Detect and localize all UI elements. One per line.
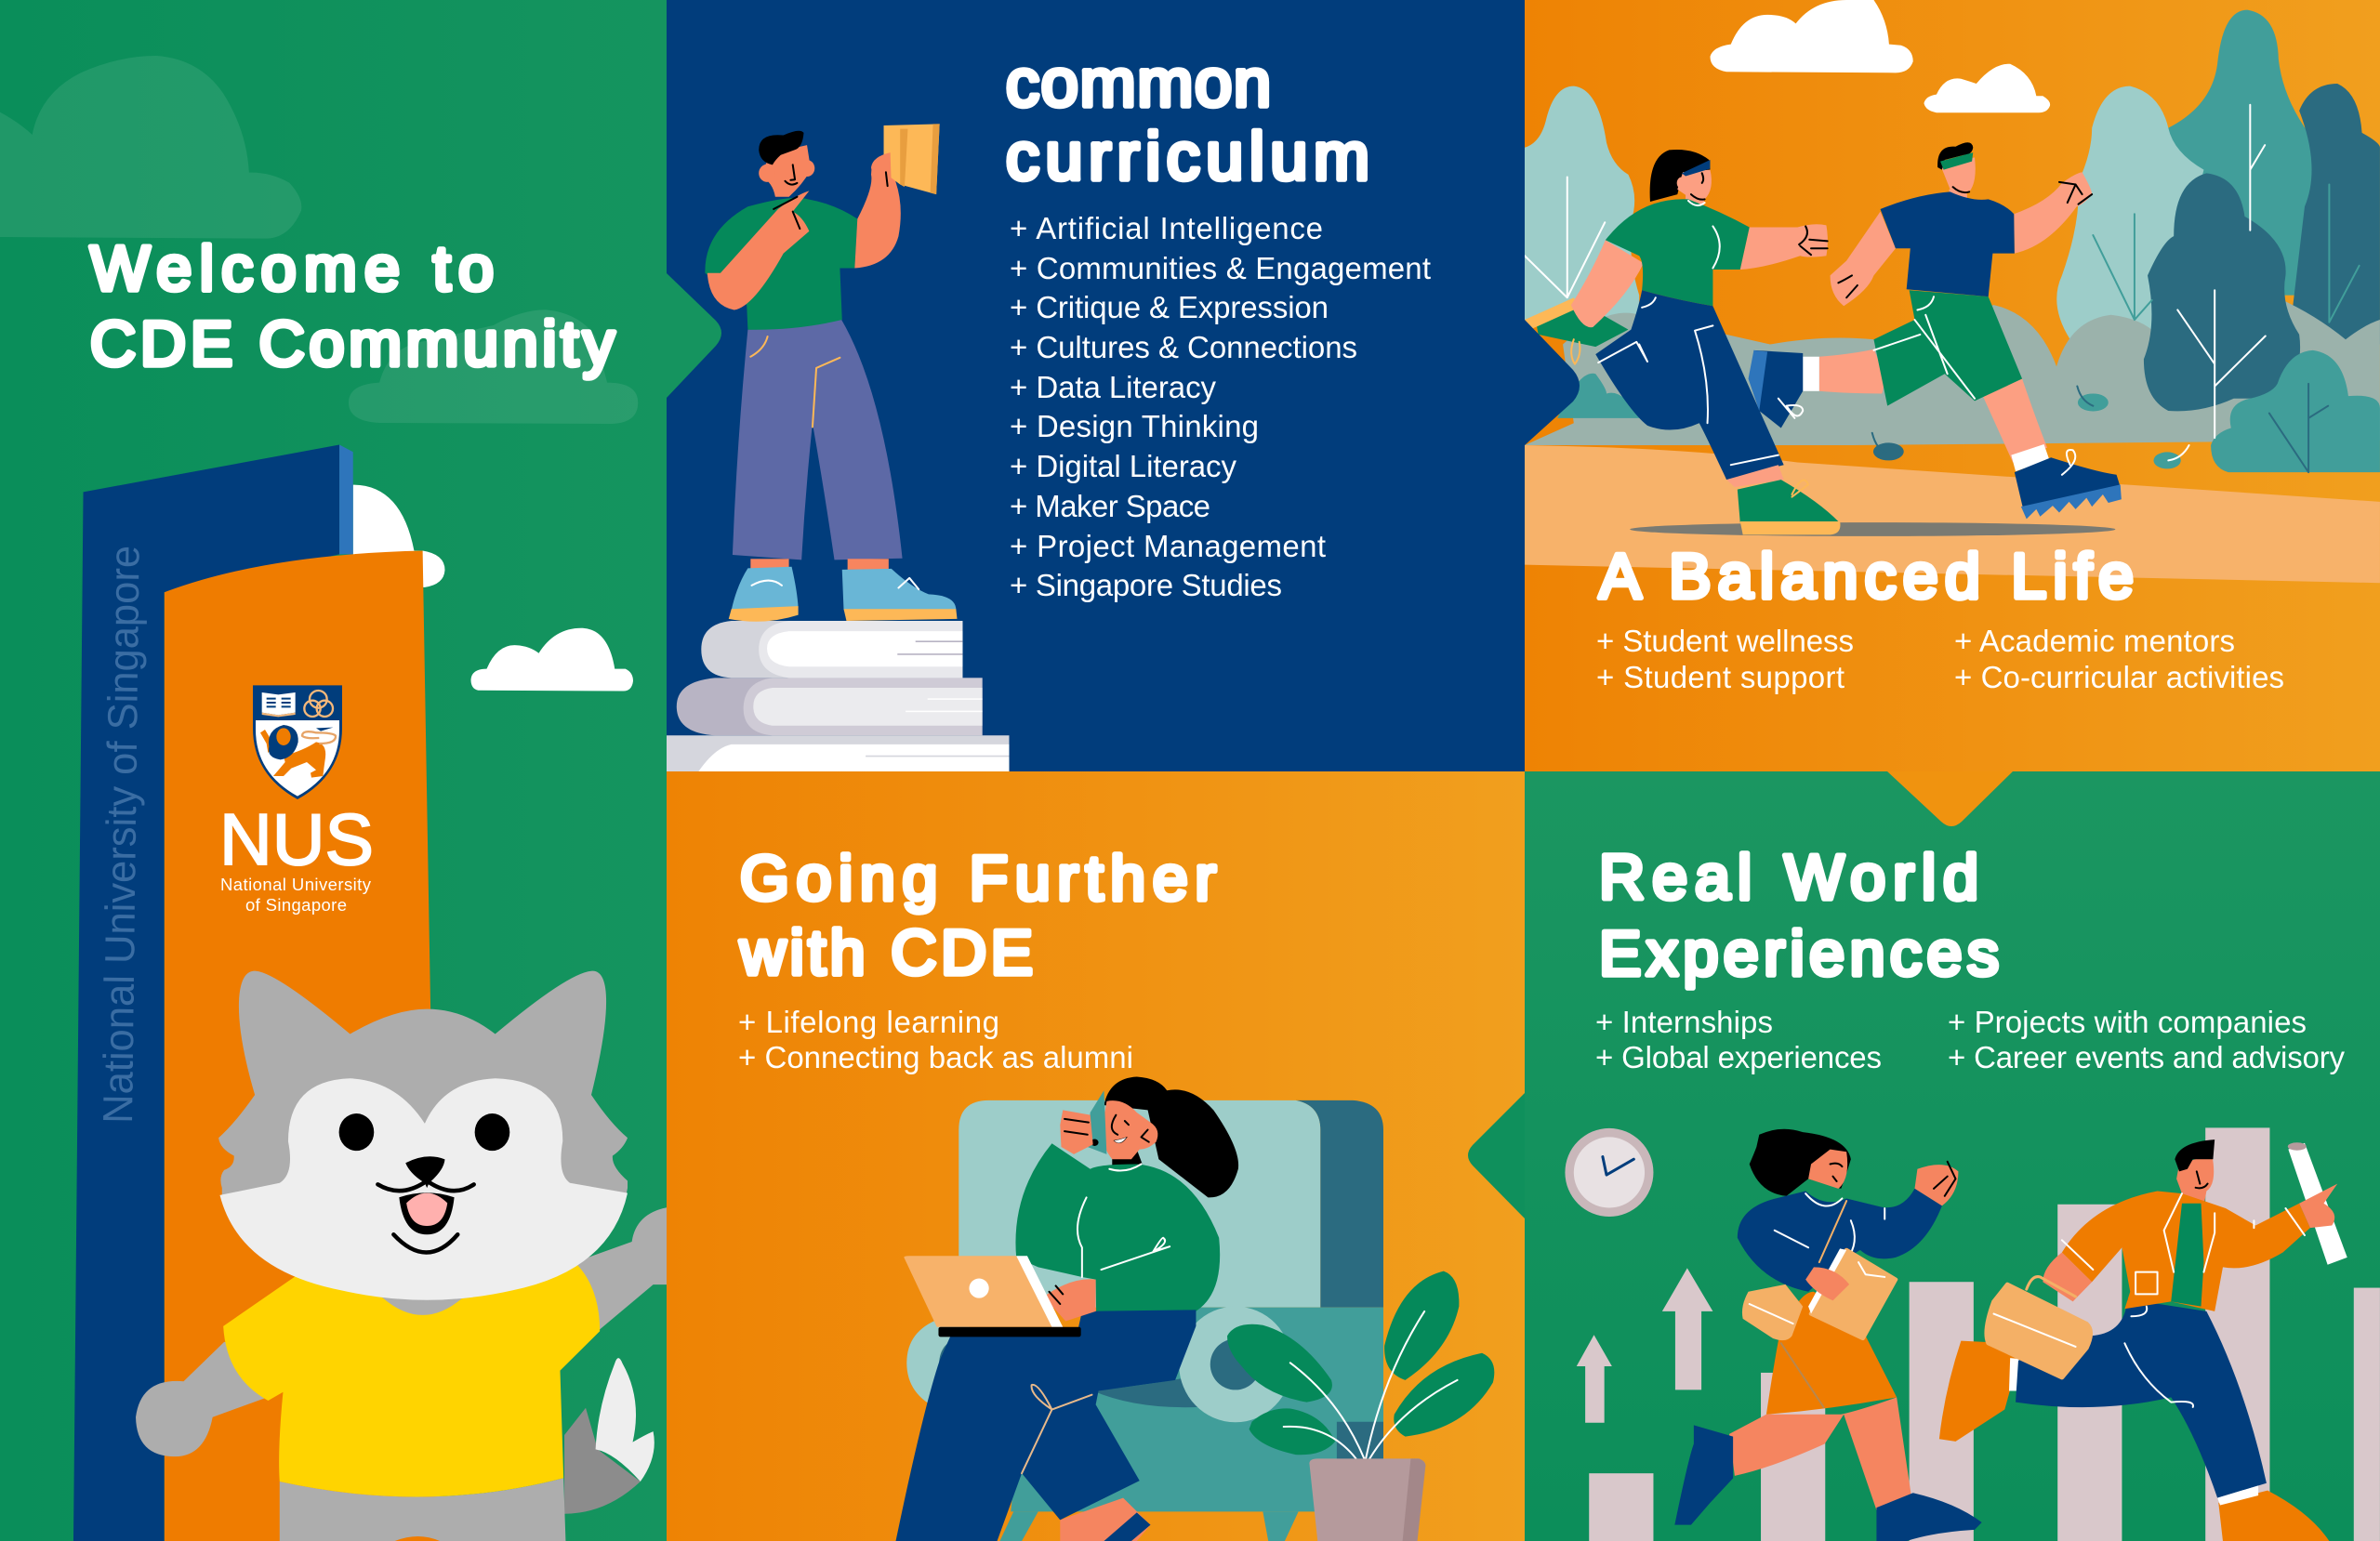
list: real world: + Global experiences xyxy=(1595,1040,1882,1074)
potted plant xyxy=(1227,1271,1494,1541)
woman on phone with laptop xyxy=(896,1076,1238,1541)
NUS crest xyxy=(253,685,342,799)
list: real world: + Career events and advisory xyxy=(1948,1040,2345,1074)
armchair xyxy=(906,1100,1383,1541)
list: balanced life: + Student support xyxy=(1596,660,1844,694)
list: real world: + Projects with companies xyxy=(1948,1005,2307,1039)
heading: common curriculum: curriculum xyxy=(1006,120,1369,194)
heading: going further: with CDE xyxy=(739,917,1033,988)
man running with briefcase and scroll xyxy=(1939,1139,2347,1541)
legs xyxy=(280,1478,565,1541)
arrow: welcome to curriculum xyxy=(667,273,721,398)
list: curriculum modules: + Artificial Intelligence xyxy=(1010,211,1323,245)
heading: welcome: Welcome to xyxy=(90,233,494,304)
park scene xyxy=(1525,0,2380,583)
tower side label: National University of Singapore xyxy=(94,546,149,1124)
list: going further: + Connecting back as alumni xyxy=(738,1040,1133,1074)
list: going further: + Lifelong learning xyxy=(738,1005,999,1039)
list: curriculum modules xyxy=(1010,211,1431,602)
heading: welcome xyxy=(90,233,615,379)
neck xyxy=(382,1297,462,1315)
heading: going further: Going Further xyxy=(740,843,1216,914)
heading: real world: Experiences xyxy=(1599,918,1999,989)
bar chart and growth arrows xyxy=(1577,1127,2380,1541)
woman running with folder xyxy=(1674,1129,1982,1541)
runner: woman xyxy=(1525,150,1840,534)
faint background clouds xyxy=(0,56,638,424)
panel: common curriculum xyxy=(666,0,1525,771)
panel: welcome xyxy=(0,0,668,1541)
arrow: into balanced life xyxy=(1525,320,1580,445)
NUS wordmark: National University xyxy=(220,875,372,894)
runner: man xyxy=(1749,142,2122,519)
NUS wordmark: of Singapore xyxy=(245,895,347,915)
list: balanced life xyxy=(1596,624,2284,694)
heading: real world xyxy=(1599,842,1999,989)
heading: real world: Real World xyxy=(1599,842,1978,913)
list: curriculum modules: + Project Management xyxy=(1010,529,1326,563)
list: curriculum modules: + Design Thinking xyxy=(1010,409,1259,443)
shirt xyxy=(223,1259,600,1496)
list: balanced life: + Co-curricular activities xyxy=(1954,660,2284,694)
list: curriculum modules: + Critique & Expression xyxy=(1010,290,1329,324)
icon: clock xyxy=(1565,1128,1653,1217)
list: going further xyxy=(738,1005,1133,1074)
list: curriculum modules: + Digital Literacy xyxy=(1010,449,1236,483)
arrow: into going further xyxy=(1468,1093,1525,1218)
list: real world: + Internships xyxy=(1595,1005,1773,1039)
heading: a balanced life: A Balanced Life xyxy=(1599,541,2134,612)
student figure with book xyxy=(705,124,958,622)
heading: common curriculum xyxy=(1006,67,1368,182)
list: curriculum modules: + Maker Space xyxy=(1010,489,1210,523)
list: balanced life: + Student wellness xyxy=(1596,624,1854,658)
heading: common curriculum: common xyxy=(1006,46,1271,121)
mascot: husky in yellow shirt xyxy=(136,971,668,1541)
arrow: into real world xyxy=(1887,771,2013,826)
list: curriculum modules: + Cultures & Connections xyxy=(1010,330,1357,364)
NUS tower xyxy=(73,445,633,1541)
stack of books xyxy=(666,621,1009,771)
panel: real world experiences xyxy=(1468,771,2380,1541)
arms xyxy=(136,1207,668,1456)
list: curriculum modules: + Data Literacy xyxy=(1010,370,1216,404)
panel: a balanced life xyxy=(1525,0,2380,771)
head xyxy=(218,971,628,1301)
heading: welcome: CDE Community xyxy=(90,309,615,379)
panel: going further xyxy=(667,771,1525,1541)
list: curriculum modules: + Communities & Engagement xyxy=(1010,251,1431,285)
heading: going further xyxy=(739,843,1216,988)
list: curriculum modules: + Singapore Studies xyxy=(1010,568,1282,602)
tail xyxy=(564,1358,654,1514)
list: balanced life: + Academic mentors xyxy=(1954,624,2235,658)
NUS wordmark xyxy=(221,812,372,915)
NUS wordmark: NUS xyxy=(219,798,374,880)
list: real world xyxy=(1595,1005,2345,1074)
